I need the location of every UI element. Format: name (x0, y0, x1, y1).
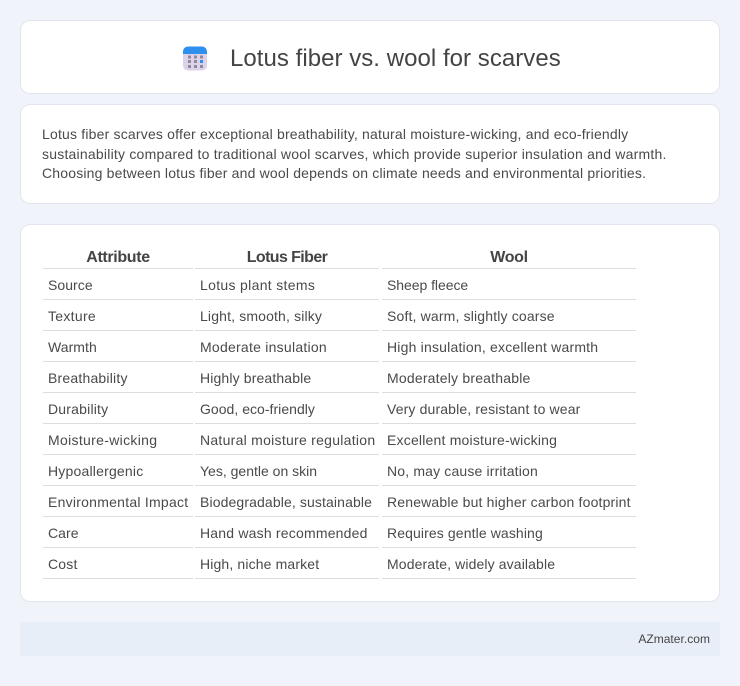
table header: Lotus Fiber (247, 249, 327, 266)
row: Source (43, 277, 636, 300)
row: Breathability: Moderately breathable (387, 370, 531, 386)
icon: calendar (183, 46, 207, 70)
row: Environmental Impact: Environmental Impact (48, 494, 188, 510)
row: Hypoallergenic: No, may cause irritation (387, 463, 538, 479)
row: Warmth (43, 339, 636, 362)
table header (86, 249, 528, 266)
panel: comparison table (20, 224, 720, 602)
table header: Wool (490, 249, 528, 266)
row: Cost: High, niche market (200, 556, 319, 572)
row: Moisture-wicking: Excellent moisture-wicking (387, 432, 557, 448)
title: Lotus fiber vs. wool for scarves (230, 45, 561, 72)
row: Durability: Good, eco-friendly (200, 401, 315, 417)
row: Warmth: High insulation, excellent warmth (387, 339, 598, 355)
row: Breathability: Highly breathable (200, 370, 311, 386)
row: Breathability (43, 370, 636, 393)
row: Durability: Very durable, resistant to wear (387, 401, 580, 417)
row: Texture: Soft, warm, slightly coarse (387, 308, 555, 324)
row: Texture: Light, smooth, silky (200, 308, 322, 324)
row: Moisture-wicking: Moisture-wicking (48, 432, 157, 448)
row: Moisture-wicking (43, 432, 636, 455)
row: Texture: Texture (48, 308, 96, 324)
summary text: Choosing between lotus fiber and wool depends on climate needs and environmental priorities. (42, 165, 646, 181)
row: Hypoallergenic: Hypoallergenic (48, 463, 143, 479)
row: Durability: Durability (48, 401, 108, 417)
row: Texture (43, 308, 636, 331)
row: Care: Requires gentle washing (387, 525, 543, 541)
summary text: Lotus fiber scarves offer exceptional breathability, natural moisture-wicking, and eco-friendly (42, 126, 628, 142)
row: Environmental Impact (43, 494, 636, 517)
row: Cost: Moderate, widely available (387, 556, 555, 572)
row: Care (43, 525, 636, 548)
row: Breathability: Breathability (48, 370, 128, 386)
row: Moisture-wicking: Natural moisture regulation (200, 432, 375, 448)
row: Care: Care (48, 525, 79, 541)
row: Environmental Impact: Renewable but higher carbon footprint (387, 494, 631, 510)
row: Durability (43, 401, 636, 424)
row: Environmental Impact: Biodegradable, sustainable (200, 494, 372, 510)
footer credit: AZmater.com (638, 632, 710, 646)
row: Source: Source (48, 277, 93, 293)
row: Cost (43, 556, 636, 579)
row: Warmth: Moderate insulation (200, 339, 327, 355)
row: Hypoallergenic: Yes, gentle on skin (200, 463, 317, 479)
panel: title card (20, 20, 720, 94)
row: Cost: Cost (48, 556, 78, 572)
summary text: sustainability compared to traditional wool scarves, which provide superior insulation and warmth. (42, 146, 667, 162)
row: Hypoallergenic (43, 463, 636, 486)
row: Source: Sheep fleece (387, 277, 468, 293)
row: Warmth: Warmth (48, 339, 97, 355)
summary text (42, 126, 667, 181)
table header: Attribute (86, 249, 150, 266)
row: Care: Hand wash recommended (200, 525, 368, 541)
panel: summary (20, 104, 720, 204)
row: Source: Lotus plant stems (200, 277, 315, 293)
footer bar (20, 622, 720, 656)
